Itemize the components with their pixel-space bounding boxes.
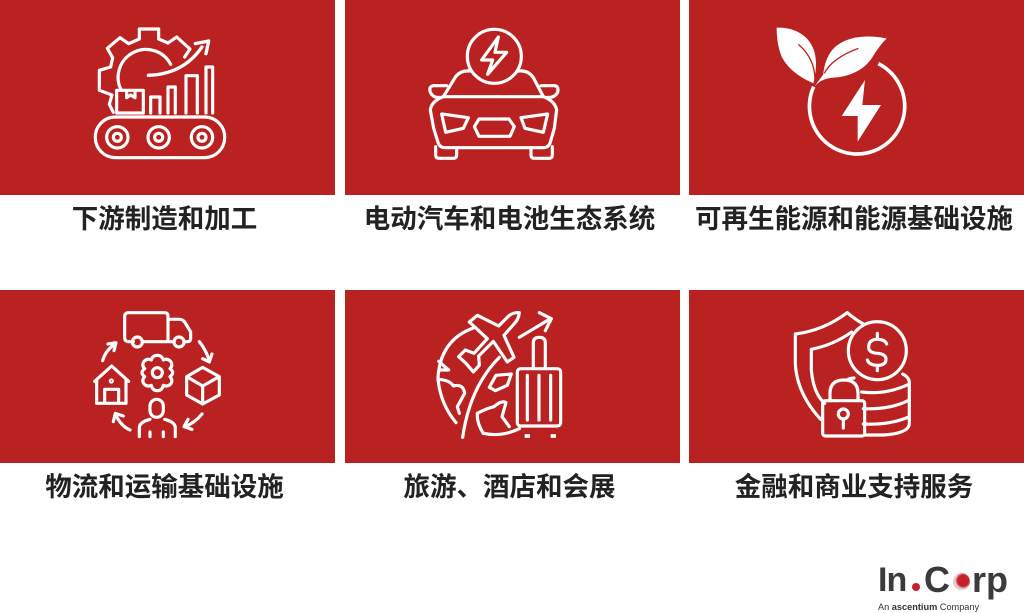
- heading: renewable energy: 可再生能源和能源基础设施: [695, 204, 1013, 234]
- icon: logistics cycle: [95, 313, 219, 437]
- icon: electric car: [430, 29, 558, 158]
- icon: shield coins and lock: [795, 313, 909, 436]
- logo wordmark: C: C: [924, 559, 950, 600]
- logo tagline: An ascentium Company: [878, 602, 979, 612]
- heading: downstream manufacturing: 下游制造和加工: [72, 204, 257, 234]
- panel: downstream manufacturing: [0, 0, 335, 194]
- heading: electric vehicles: 电动汽车和电池生态系统: [364, 204, 655, 234]
- logo wordmark: In: In: [878, 561, 906, 599]
- icon: globe plane and suitcase: [438, 313, 561, 437]
- heading: logistics: 物流和运输基础设施: [45, 472, 284, 502]
- panel: tourism: [344, 290, 680, 463]
- panel: electric vehicles: [344, 0, 680, 194]
- heading: tourism: 旅游、酒店和会展: [404, 472, 616, 502]
- logo wordmark: rp: rp: [972, 559, 1008, 600]
- heading: finance: 金融和商业支持服务: [735, 472, 973, 502]
- icon: leaves and energy bolt: [777, 28, 905, 154]
- logo red dot: [912, 583, 920, 591]
- logo: InCorp: [878, 559, 1008, 612]
- logo globe: [953, 573, 970, 590]
- panel: finance: [689, 290, 1024, 463]
- panel: logistics: [0, 290, 335, 463]
- icon: gear conveyor and growth chart: [95, 29, 225, 158]
- panel: renewable energy: [689, 0, 1024, 194]
